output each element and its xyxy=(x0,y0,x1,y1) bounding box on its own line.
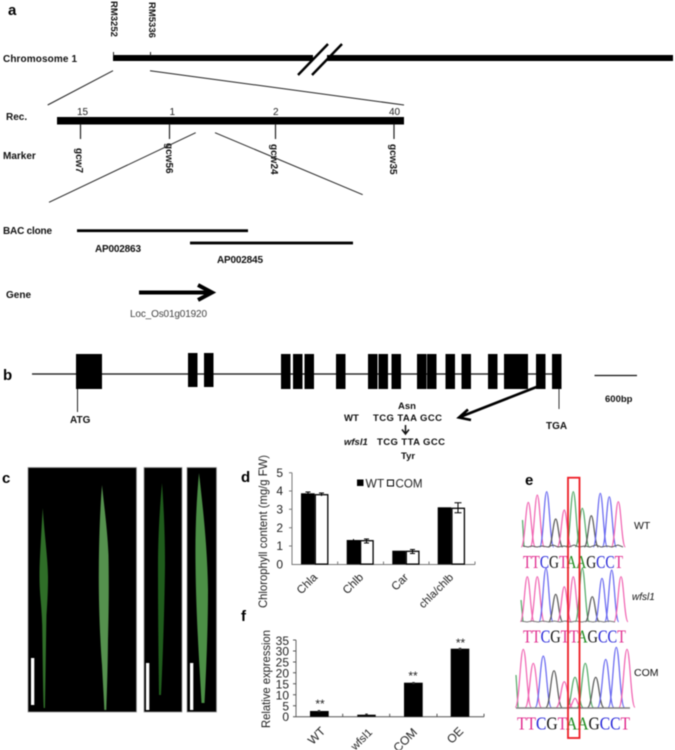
y axis tick labels: 4 xyxy=(276,484,283,498)
panel a: genetic map xyxy=(3,1,673,320)
y axis tick labels: 25 xyxy=(276,656,289,670)
wfsl1 label: wfsl1 xyxy=(632,592,655,603)
exons xyxy=(76,353,562,389)
mutation annotation: Tyr xyxy=(401,451,415,462)
TGA stop marker xyxy=(546,389,567,432)
WT sequence: TTCGTAAGCCT xyxy=(523,552,623,572)
significance stars: ** xyxy=(456,636,465,650)
recombinant counts: 40 xyxy=(389,107,401,118)
mutation annotation: WT xyxy=(344,413,359,424)
recombination bar xyxy=(57,117,404,124)
y axis tick labels: 0 xyxy=(282,710,289,724)
panel label d: d xyxy=(241,469,250,486)
panel label f: f xyxy=(241,608,247,625)
bars: COM xyxy=(315,495,464,564)
chromosome bar with break xyxy=(113,44,673,75)
mutation annotation: Asn xyxy=(398,401,416,412)
y axis title: Relative expression xyxy=(259,630,273,728)
panel label c: c xyxy=(2,470,10,487)
panel label b: b xyxy=(3,367,12,384)
scale bar: 600bp xyxy=(605,394,633,405)
mutation annotation xyxy=(344,401,445,462)
BAC clone AP002863: AP002863 xyxy=(95,244,141,255)
marker names: gcw24 xyxy=(268,144,279,175)
panel label a: a xyxy=(8,2,17,19)
significance stars: ** xyxy=(408,669,418,683)
COM chromatogram xyxy=(515,647,635,709)
x axis category labels xyxy=(305,724,466,750)
panel e: sequencing chromatograms xyxy=(515,472,658,738)
panel b: gene structure xyxy=(3,353,637,462)
gene locus name: Loc_Os01g01920 xyxy=(130,309,207,320)
COM label: COM xyxy=(634,667,658,679)
x axis category labels xyxy=(295,571,456,611)
marker names: gcw35 xyxy=(387,144,398,175)
mutation annotation: TCG TTA GCC xyxy=(377,437,445,448)
ATG start marker xyxy=(70,389,91,426)
leaf photo 3 xyxy=(187,468,216,712)
marker ticks xyxy=(80,124,394,139)
y axis tick labels: 15 xyxy=(276,678,289,692)
red highlight box xyxy=(568,478,580,738)
y axis tick labels: 10 xyxy=(276,688,289,702)
x axis category labels: Chlb xyxy=(341,572,366,597)
legend: WT xyxy=(366,476,385,490)
panel label e: e xyxy=(525,472,533,489)
Rec. label: Rec. xyxy=(6,112,27,123)
x axis category labels: OE xyxy=(444,724,466,746)
zoom lines from chromosome to recombination map xyxy=(48,71,404,105)
mutation annotation: wfsl1 xyxy=(344,437,368,448)
zoom lines from recombination map to BAC clones xyxy=(49,133,363,202)
intron line xyxy=(32,373,554,375)
y axis title: Chlorophyll content (mg/g FW) xyxy=(256,455,270,608)
wfsl1 chromatogram xyxy=(520,568,628,622)
x axis category labels: chla/chlb xyxy=(417,572,456,611)
recombinant counts: 2 xyxy=(273,107,279,118)
TGA stop marker: TGA xyxy=(546,421,567,432)
Gene label: Gene xyxy=(6,290,31,301)
error bars xyxy=(306,492,462,554)
BAC clone AP002845: AP002845 xyxy=(217,255,263,266)
y axis tick labels: 5 xyxy=(282,700,289,714)
y axis tick labels: 1 xyxy=(276,539,283,553)
WT label: WT xyxy=(634,520,651,532)
y axis tick labels xyxy=(276,634,289,724)
marker names: gcw7 xyxy=(73,148,84,173)
x axis category labels: Chla xyxy=(295,571,321,597)
y axis tick labels: 3 xyxy=(276,502,283,516)
panel f: relative expression bar chart xyxy=(241,608,484,750)
legend xyxy=(357,476,422,490)
axes xyxy=(289,473,475,564)
y axis tick labels: 5 xyxy=(276,466,283,480)
gene arrow xyxy=(139,285,212,300)
marker label RM5336: RM5336 xyxy=(146,2,157,38)
leaf photo 1: two leaves xyxy=(28,468,136,712)
bars: WT xyxy=(301,493,451,564)
legend: COM xyxy=(396,476,422,490)
Marker label: Marker xyxy=(3,151,36,162)
panel c: leaf photographs xyxy=(2,468,216,712)
wfsl1 sequence: TTCGTTAGCCT xyxy=(523,626,626,646)
marker label RM3252: RM3252 xyxy=(108,1,119,37)
x axis category labels: Car xyxy=(390,572,411,593)
mutation annotation: TCG TAA GCC xyxy=(373,413,442,424)
leaf photo 2 xyxy=(144,468,182,712)
mutation arrow xyxy=(459,387,536,420)
error caps xyxy=(319,648,460,715)
COM sequence: TTCGTAAGCCT xyxy=(517,714,630,734)
significance stars: ** xyxy=(315,697,325,711)
y axis tick labels: 20 xyxy=(276,666,289,680)
ATG start marker: ATG xyxy=(70,415,91,426)
marker names xyxy=(73,143,398,175)
expression bars xyxy=(310,649,469,717)
panel d: chlorophyll bar chart xyxy=(241,455,475,611)
significance stars xyxy=(315,636,465,711)
x axis line and ticks xyxy=(293,640,484,717)
BAC clone label: BAC clone xyxy=(3,226,52,237)
scale bar xyxy=(594,376,637,405)
y axis tick labels: 30 xyxy=(276,644,289,658)
y axis tick labels: 35 xyxy=(276,634,289,648)
marker names: gcw56 xyxy=(163,143,174,174)
WT chromatogram xyxy=(521,492,625,547)
x axis category labels: WT xyxy=(305,724,329,747)
y axis tick labels: 0 xyxy=(276,558,283,572)
chromosome label: Chromosome 1 xyxy=(3,54,77,65)
y axis tick labels xyxy=(276,466,283,572)
recombinant counts xyxy=(77,107,401,118)
y axis tick labels: 2 xyxy=(276,521,283,535)
recombinant counts: 15 xyxy=(77,107,89,118)
recombinant counts: 1 xyxy=(170,107,176,118)
axes xyxy=(295,640,297,717)
